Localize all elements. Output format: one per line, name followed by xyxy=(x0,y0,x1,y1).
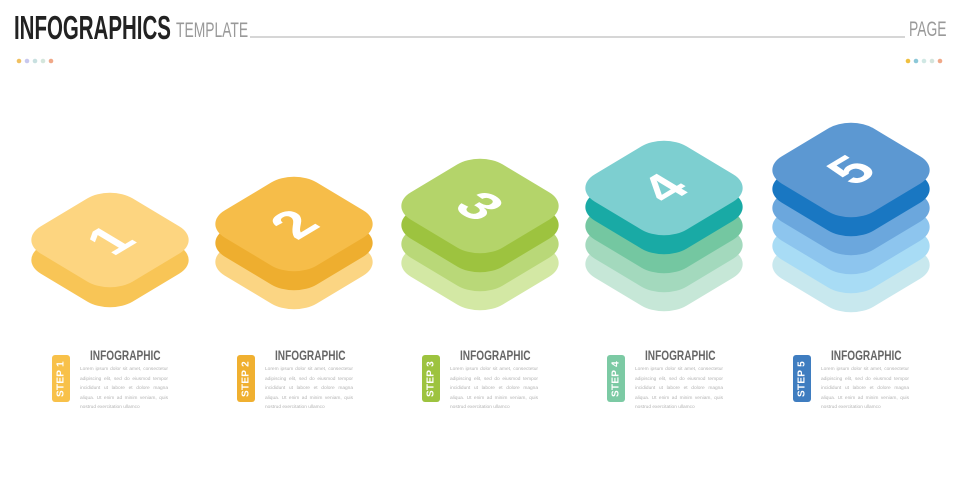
block 2 xyxy=(202,169,386,317)
step 3 heading: INFOGRAPHIC xyxy=(460,347,531,363)
block 5 xyxy=(759,115,943,320)
step 4 tag: STEP 4 xyxy=(610,360,622,397)
block 1: 1 xyxy=(73,218,148,263)
step 3 body: Lorem ipsum dolor sit amet, consectetur adipiscing elit, sed do eiusmod tempor incididunt ut labore et dolore magna aliqua. Ut enim ad minim veniam, quis nostrud exercitation ullamco xyxy=(450,367,538,410)
step 3 tag: STEP 3 xyxy=(426,360,436,397)
step 2 text xyxy=(237,347,353,410)
step 2 body: Lorem ipsum dolor sit amet, consectetur adipiscing elit, sed do eiusmod tempor incididunt ut labore et dolore magna aliqua. Ut enim ad minim veniam, quis nostrud exercitation ullamco xyxy=(265,367,353,410)
step 3 text xyxy=(422,347,538,410)
dots left xyxy=(16,58,54,64)
step 1 heading: INFOGRAPHIC xyxy=(90,347,161,363)
step 1 tag xyxy=(52,355,70,402)
title: INFOGRAPHICS xyxy=(14,9,171,46)
page label: PAGE xyxy=(909,18,946,41)
step 1 body: Lorem ipsum dolor sit amet, consectetur adipiscing elit, sed do eiusmod tempor incididunt ut labore et dolore magna aliqua. Ut enim ad minim veniam, quis nostrud exercitation ullamco xyxy=(80,367,168,410)
step 1 text xyxy=(52,347,168,410)
step 4 tag xyxy=(607,355,625,402)
block 1 xyxy=(18,185,202,315)
step 5 tag: STEP 5 xyxy=(796,360,808,397)
step 2 tag xyxy=(237,355,255,402)
step 3 tag xyxy=(422,355,440,402)
header xyxy=(14,9,946,64)
step 5 text xyxy=(793,347,909,410)
block 4 xyxy=(572,133,756,319)
block 4: 4 xyxy=(627,165,703,211)
step 1 tag: STEP 1 xyxy=(56,360,66,397)
dots right xyxy=(906,58,942,64)
block 3: 3 xyxy=(442,184,517,229)
step 4 text xyxy=(607,347,723,410)
block 3 xyxy=(388,151,572,318)
step 4 body: Lorem ipsum dolor sit amet, consectetur adipiscing elit, sed do eiusmod tempor incididunt ut labore et dolore magna aliqua. Ut enim ad minim veniam, quis nostrud exercitation ullamco xyxy=(635,367,723,410)
subtitle: TEMPLATE xyxy=(176,19,248,42)
step 5 heading: INFOGRAPHIC xyxy=(831,347,902,363)
step 2 tag: STEP 2 xyxy=(240,360,252,397)
block 2: 2 xyxy=(257,202,332,247)
step 5 tag xyxy=(793,355,811,402)
step 2 heading: INFOGRAPHIC xyxy=(275,347,346,363)
step 4 heading: INFOGRAPHIC xyxy=(645,347,716,363)
block 5: 5 xyxy=(814,148,889,193)
step 5 body: Lorem ipsum dolor sit amet, consectetur adipiscing elit, sed do eiusmod tempor incididunt ut labore et dolore magna aliqua. Ut enim ad minim veniam, quis nostrud exercitation ullamco xyxy=(821,367,909,410)
